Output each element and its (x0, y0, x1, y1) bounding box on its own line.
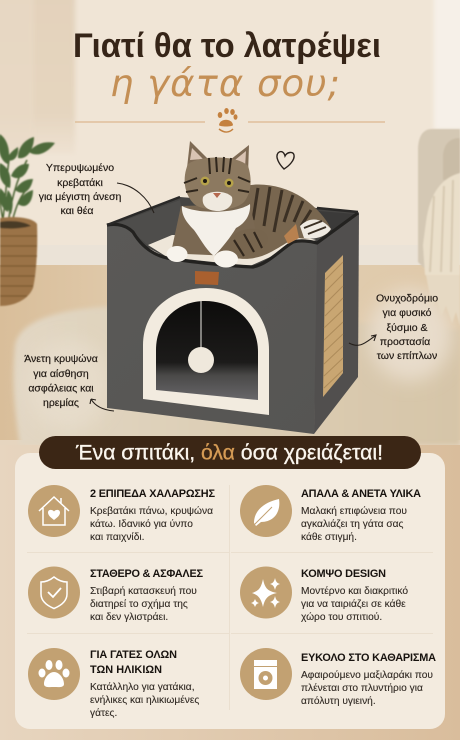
front face (107, 224, 317, 434)
feature: all ages: ΓΙΑ ΓΑΤΕΣ ΟΛΩΝ (90, 649, 177, 661)
callout: hideout: ασφάλειας και (28, 382, 94, 394)
callout: hideout (24, 353, 114, 411)
feature: all ages: Κατάλληλο για γατάκια, (90, 681, 195, 693)
callout: scratching pad: Ονυχοδρόμιο (376, 292, 438, 304)
feature: soft materials (240, 485, 421, 543)
plant in wicker basket (0, 134, 55, 306)
features panel (15, 453, 445, 729)
feature: two levels: 2 ΕΠΙΠΕΔΑ ΧΑΛΑΡΩΣΗΣ (90, 488, 215, 500)
callout: hideout: ηρεμίας (43, 397, 79, 409)
feature: elegant design: ΚΟΜΨΟ DESIGN (301, 568, 386, 580)
cat bed product (107, 141, 359, 434)
feature: all ages: ενήλικες και ηλικιωμένες (90, 694, 199, 706)
callout: raised bed: Υπερυψωμένο (46, 162, 114, 174)
arched opening trim (143, 288, 269, 415)
cat head (185, 157, 251, 210)
callout: raised bed: για μέγιστη άνεση (39, 191, 121, 203)
armchair and knitted blanket (418, 129, 460, 326)
title line 1: Γιατί θα το λατρέψει (73, 27, 381, 65)
cat ears (187, 141, 208, 168)
callout: scratching pad: για φυσικό (383, 307, 432, 319)
title divider with paw icon (75, 108, 385, 132)
callout: raised bed (39, 162, 154, 217)
feature: all ages: γάτες. (90, 707, 117, 719)
blanket fringe (425, 265, 460, 326)
sisal scratch pad (323, 255, 343, 397)
arrow (117, 183, 154, 213)
feature: easy cleaning (240, 648, 436, 707)
feature: stable and safe (28, 566, 203, 623)
icon: heart doodle (277, 152, 294, 169)
torso (172, 204, 256, 256)
right leg (216, 229, 268, 258)
feature: elegant design: χώρο του σπιτιού. (301, 611, 382, 623)
cat nose (213, 193, 221, 198)
cat eyes (200, 176, 210, 186)
callout: raised bed: και θέα (60, 205, 94, 217)
bed interior (107, 197, 358, 267)
feature: elegant design: Μοντέρνο και διακριτικό (301, 585, 408, 597)
arrow (349, 335, 376, 345)
callout: hideout: Άνετη κρυψώνα (24, 353, 98, 365)
paws (166, 246, 188, 262)
callout: scratching pad: των επίπλων (377, 350, 437, 362)
feature: easy cleaning: πλένεται στο πλυντήριο για (301, 682, 423, 694)
banner: Ένα σπιτάκι, όλα όσα χρειάζεται! (75, 442, 383, 464)
icon: sparkles (240, 566, 292, 618)
hanging ball toy (188, 301, 214, 373)
icon: washing machine (240, 648, 292, 700)
feature: easy cleaning: Αφαιρούμενο μαξιλαράκι που (301, 669, 433, 681)
callout: scratching pad (349, 292, 438, 362)
feature: soft materials: Μαλακή επιφώνεια που (301, 505, 407, 517)
feature: easy cleaning: απόλυτη υγιεινή. (301, 695, 376, 707)
callout: raised bed: κρεβατάκι (57, 177, 103, 189)
callout: hideout: για αίσθηση (33, 368, 89, 380)
feature: two levels: και παιχνίδι. (90, 531, 144, 543)
feature: stable and safe: και δεν γλιστράει. (90, 611, 168, 623)
icon: paw (218, 108, 238, 132)
banner (39, 436, 421, 469)
leather tag (195, 271, 219, 285)
cat body (205, 184, 331, 259)
feature: soft materials: κάθε στιγμή. (301, 531, 357, 543)
title (73, 27, 381, 105)
title line 2 script: η γάτα σου; (110, 62, 340, 105)
feature: stable and safe: ΣΤΑΘΕΡΟ & ΑΣΦΑΛΕΣ (90, 568, 203, 580)
cushion (148, 235, 316, 266)
feature: two levels: κάτω. Ιδανικό για ύνπο (90, 518, 193, 530)
icon: leaf (240, 485, 292, 537)
icon: house with heart (28, 485, 80, 537)
feature: all ages: ΤΩΝ ΗΛΙΚΙΩΝ (90, 664, 162, 676)
feature: elegant design (240, 566, 408, 623)
feature: two levels: Κρεβατάκι πάνω, κρυψώνα (90, 505, 213, 517)
feature: soft materials: αγκαλιάζει τη γάτα σας (301, 518, 403, 530)
right side face (314, 212, 359, 434)
arrow (90, 399, 114, 411)
cat (166, 141, 331, 268)
feature: two levels (28, 485, 215, 543)
feature: stable and safe: διατηρεί το σχήμα της (90, 598, 188, 610)
feature: all ages (28, 648, 199, 719)
dark rim (107, 213, 358, 267)
callout: scratching pad: ξύσμιο & (386, 322, 428, 334)
feature: soft materials: ΑΠΑΛΑ & ΑΝΕΤΑ ΥΛΙΚΑ (301, 488, 421, 500)
callout: scratching pad: προστασία (380, 336, 430, 348)
cat chest (182, 204, 250, 256)
icon: shield check (28, 566, 80, 618)
feature: elegant design: για να ταιριάζει σε κάθε (301, 598, 406, 610)
icon: paw (28, 648, 80, 700)
feature: stable and safe: Στιβαρή κατασκευή που (90, 585, 197, 597)
feature: easy cleaning: ΕΥΚΟΛΟ ΣΤΟ ΚΑΘΑΡΙΣΜΑ (301, 652, 436, 664)
arched opening (156, 301, 258, 400)
